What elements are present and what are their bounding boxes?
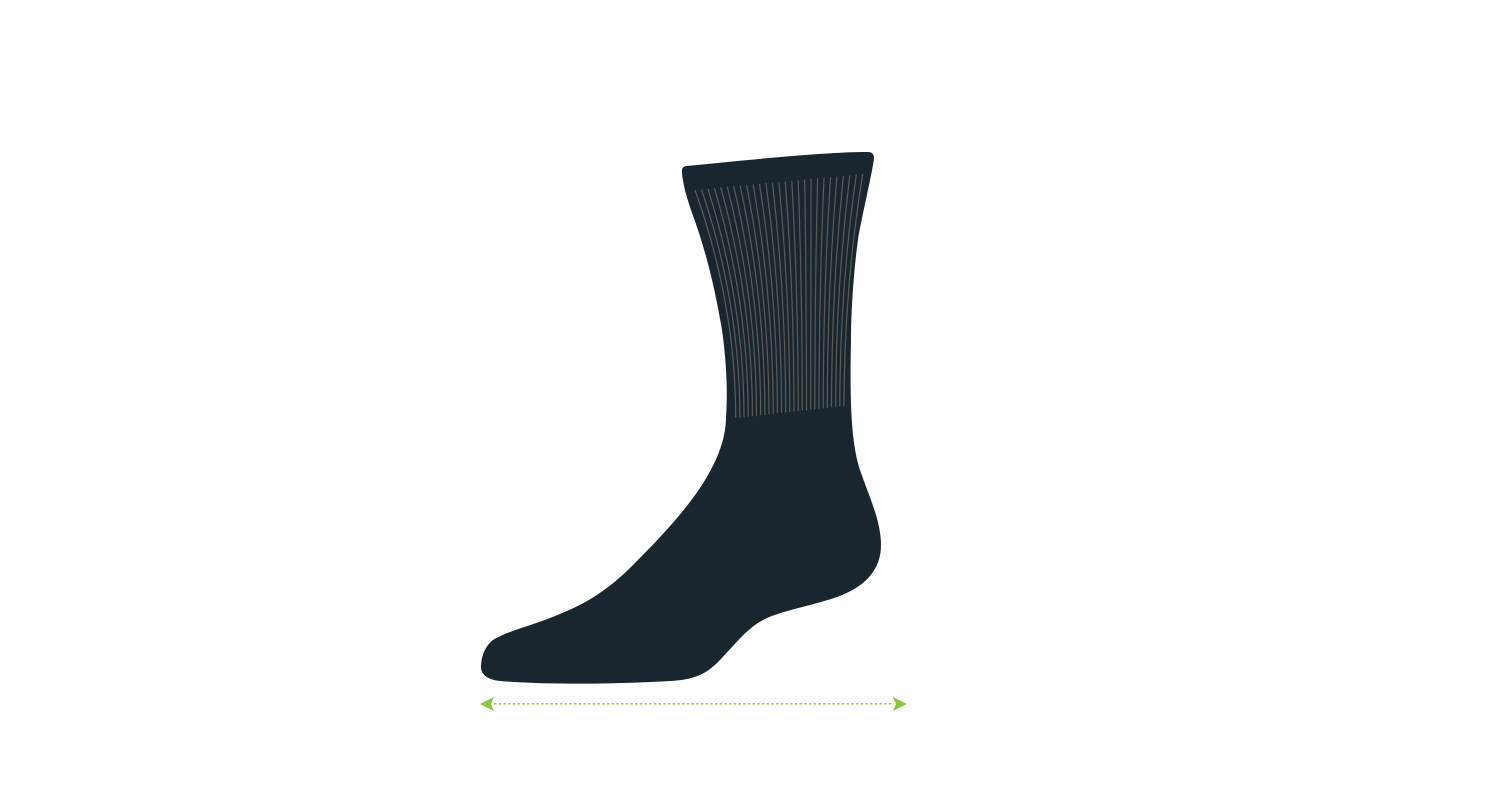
arrow: foot length measure (480, 697, 907, 711)
sock silhouette (481, 152, 881, 684)
ribbing lines on sock leg (695, 174, 863, 418)
sock (481, 152, 881, 684)
